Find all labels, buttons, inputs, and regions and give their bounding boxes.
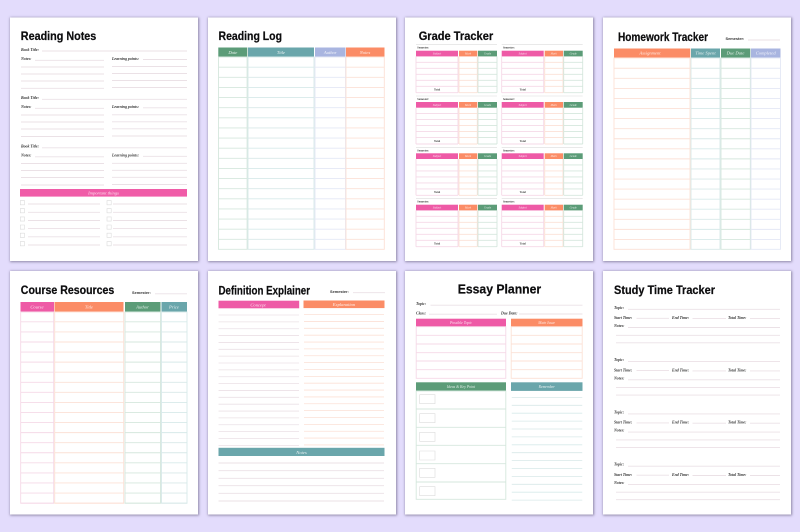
grade table 1: Semester:: [417, 47, 429, 50]
grade table 5: Total: [434, 191, 440, 194]
grade table 7: [416, 199, 497, 247]
grade table 7: Mark: [464, 206, 472, 209]
study session 4: Notes:: [613, 481, 625, 485]
banner: Notes: Notes: [295, 450, 307, 455]
study session 1: [613, 306, 780, 343]
grade table 8: Grade: [570, 206, 578, 209]
title: Homework Tracker: Homework Tracker: [618, 32, 708, 44]
title: Essay Planner: Essay Planner: [458, 283, 541, 297]
table: homework: Assignment: [638, 51, 661, 56]
page: Grade Tracker: [405, 18, 594, 262]
grade table 7: Semester:: [417, 201, 429, 204]
header: Concept: [218, 301, 299, 308]
study session 1: Notes:: [613, 324, 625, 328]
grade table 4: Mark: [550, 104, 557, 107]
study session 4: End Time:: [671, 473, 690, 477]
title: Grade Tracker: Grade Tracker: [419, 31, 494, 43]
semester field: [726, 36, 780, 41]
section: Ideas and Key Point: Ideas & Key Point: [446, 385, 476, 389]
section: Remember: Remember: [538, 385, 555, 389]
note block 3: Learning points:: [111, 154, 140, 158]
table: homework: Due Date: [726, 51, 744, 56]
semester field: Semester:: [132, 290, 151, 295]
grade table 4: [502, 96, 583, 144]
study session 1: End Time:: [671, 316, 690, 320]
fields: topic, class, due date: [416, 302, 582, 316]
section: Main Issue: [511, 319, 582, 378]
fields: topic, class, due date: Topic:: [416, 302, 427, 306]
banner: Important things: Important things: [87, 191, 119, 196]
note block 3: Book Title:: [20, 144, 40, 148]
checklist: [20, 201, 187, 246]
study session 1: Topic:: [614, 306, 625, 310]
study session 2: End Time:: [671, 368, 690, 372]
study session 4: Topic:: [614, 463, 625, 467]
note block 3: [20, 144, 187, 185]
study session 2: [613, 358, 780, 395]
notes lines: [218, 463, 384, 501]
section: Possible Topic: Possible Topic: [449, 321, 472, 325]
note block 3: Notes:: [20, 154, 32, 158]
study session 2: Topic:: [614, 358, 625, 362]
note block 2: Book Title:: [20, 96, 40, 100]
table: homework: Time Spent: [695, 51, 716, 56]
page: Essay Planner: [405, 271, 594, 516]
page: Study Time Tracker: [603, 271, 792, 516]
grade table 6: Mark: [550, 155, 557, 158]
grade table 5: [416, 147, 497, 195]
study session 4: Total Time:: [728, 473, 747, 477]
grade table 5: Subject: [433, 155, 441, 158]
section: Remember: [511, 382, 582, 501]
table: reading log: Title: [277, 50, 285, 55]
header: Concept: Concept: [250, 302, 266, 307]
grade table 6: [502, 147, 583, 195]
grade table 3: Subject: [433, 104, 441, 107]
semester field: Semester:: [330, 289, 349, 294]
grade table 5: Semester:: [417, 149, 429, 152]
semester field: [132, 290, 187, 295]
grade table 1: Total: [434, 88, 440, 92]
grade table 3: Semester:: [417, 98, 429, 101]
study session 3: [613, 410, 780, 447]
grade table 2: [502, 45, 583, 93]
grade table 5: Grade: [484, 155, 492, 158]
table: homework: Completed: [756, 51, 776, 56]
grade table 4: Subject: [519, 104, 527, 107]
study session 3: Notes:: [613, 429, 625, 433]
grade table 3: Mark: [464, 104, 472, 107]
note block 2: Notes:: [20, 105, 32, 109]
grade table 2: Total: [520, 88, 526, 92]
fields: topic, class, due date: Class:: [416, 312, 427, 316]
study session 2: Total Time:: [728, 368, 747, 372]
title: Reading Notes: Reading Notes: [21, 31, 96, 43]
header: Explanation: [304, 300, 384, 308]
note block 1: Notes:: [20, 57, 32, 61]
study session 2: Start Time:: [614, 368, 633, 372]
study session 2: Notes:: [613, 376, 625, 380]
grade table 8: Semester:: [503, 201, 515, 204]
table: reading log: Notes: [359, 50, 370, 55]
explanation lines: [304, 314, 384, 446]
grade table 2: Subject: [519, 53, 527, 56]
grade table 4: Grade: [570, 104, 578, 107]
table: reading log: [218, 48, 384, 249]
grade table 7: Total: [434, 242, 440, 245]
table: course resources: Course: [30, 304, 44, 309]
header: Explanation: Explanation: [332, 302, 356, 307]
grade table 6: Subject: [519, 155, 527, 158]
table: reading log: Author: [323, 50, 337, 55]
study session 3: Start Time:: [614, 421, 633, 425]
grade table 6: Total: [520, 191, 526, 194]
banner: Notes: [218, 448, 384, 456]
table: course resources: Title: [85, 304, 93, 309]
grade table 7: Grade: [484, 206, 492, 209]
grade table 1: Mark: [464, 53, 472, 56]
study session 3: End Time:: [671, 421, 690, 425]
grade table 1: [416, 45, 497, 93]
grade table 1: Grade: [484, 53, 492, 56]
section: Ideas and Key Point: [416, 382, 506, 499]
page: Reading Log: [208, 18, 397, 262]
grade table 3: [416, 96, 497, 144]
section: Main Issue: Main Issue: [537, 321, 555, 325]
page: Homework Tracker: [603, 18, 792, 262]
grade table 2: Mark: [550, 53, 557, 56]
note block 1: Book Title:: [20, 48, 40, 52]
study session 4: [613, 463, 780, 500]
fields: topic, class, due date: Due Date:: [500, 312, 518, 316]
page: Reading Notes: [10, 18, 199, 262]
grade table 8: Subject: [519, 206, 527, 209]
study session 1: Start Time:: [614, 316, 633, 320]
grade table 4: Semester:: [503, 98, 515, 101]
concept lines: [219, 315, 299, 446]
grade table 8: Total: [520, 242, 526, 245]
semester field: [330, 289, 385, 294]
note block 2: Learning points:: [111, 105, 140, 109]
table: course resources: Author: [135, 304, 149, 309]
grade table 3: Grade: [484, 104, 492, 107]
title: Reading Log: Reading Log: [218, 31, 282, 43]
study session 3: Topic:: [614, 410, 625, 414]
table: course resources: Price: [168, 304, 179, 309]
page: Course Resources: [10, 271, 199, 516]
grade table 4: Total: [520, 140, 526, 143]
grade table 2: Grade: [570, 53, 578, 56]
banner: Important things: [20, 189, 187, 197]
study session 1: Total Time:: [728, 316, 747, 320]
note block 1: Learning points:: [111, 57, 140, 61]
note block 1: [20, 48, 187, 88]
table: homework: [614, 48, 780, 249]
note block 2: [20, 96, 187, 136]
table: reading log: Date: [227, 50, 237, 55]
title: Study Time Tracker: Study Time Tracker: [614, 285, 715, 297]
grade table 5: Mark: [464, 155, 472, 158]
study session 4: Start Time:: [614, 473, 633, 477]
title: Course Resources: Course Resources: [21, 285, 114, 297]
grade table 2: Semester:: [503, 47, 515, 50]
grade table 7: Subject: [433, 206, 441, 209]
grade table 1: Subject: [433, 53, 441, 56]
grade table 8: [502, 199, 583, 247]
grade table 8: Mark: [550, 206, 557, 209]
page: Definition Explainer: [208, 271, 397, 516]
section: Possible Topic: [416, 319, 506, 378]
title: Definition Explainer: Definition Explainer: [218, 286, 310, 298]
grade table 3: Total: [434, 140, 440, 143]
table: course resources: [20, 302, 187, 503]
study session 3: Total Time:: [728, 421, 747, 425]
semester field: Semester:: [726, 36, 744, 41]
grade table 6: Grade: [570, 155, 578, 158]
grade table 6: Semester:: [503, 149, 515, 152]
